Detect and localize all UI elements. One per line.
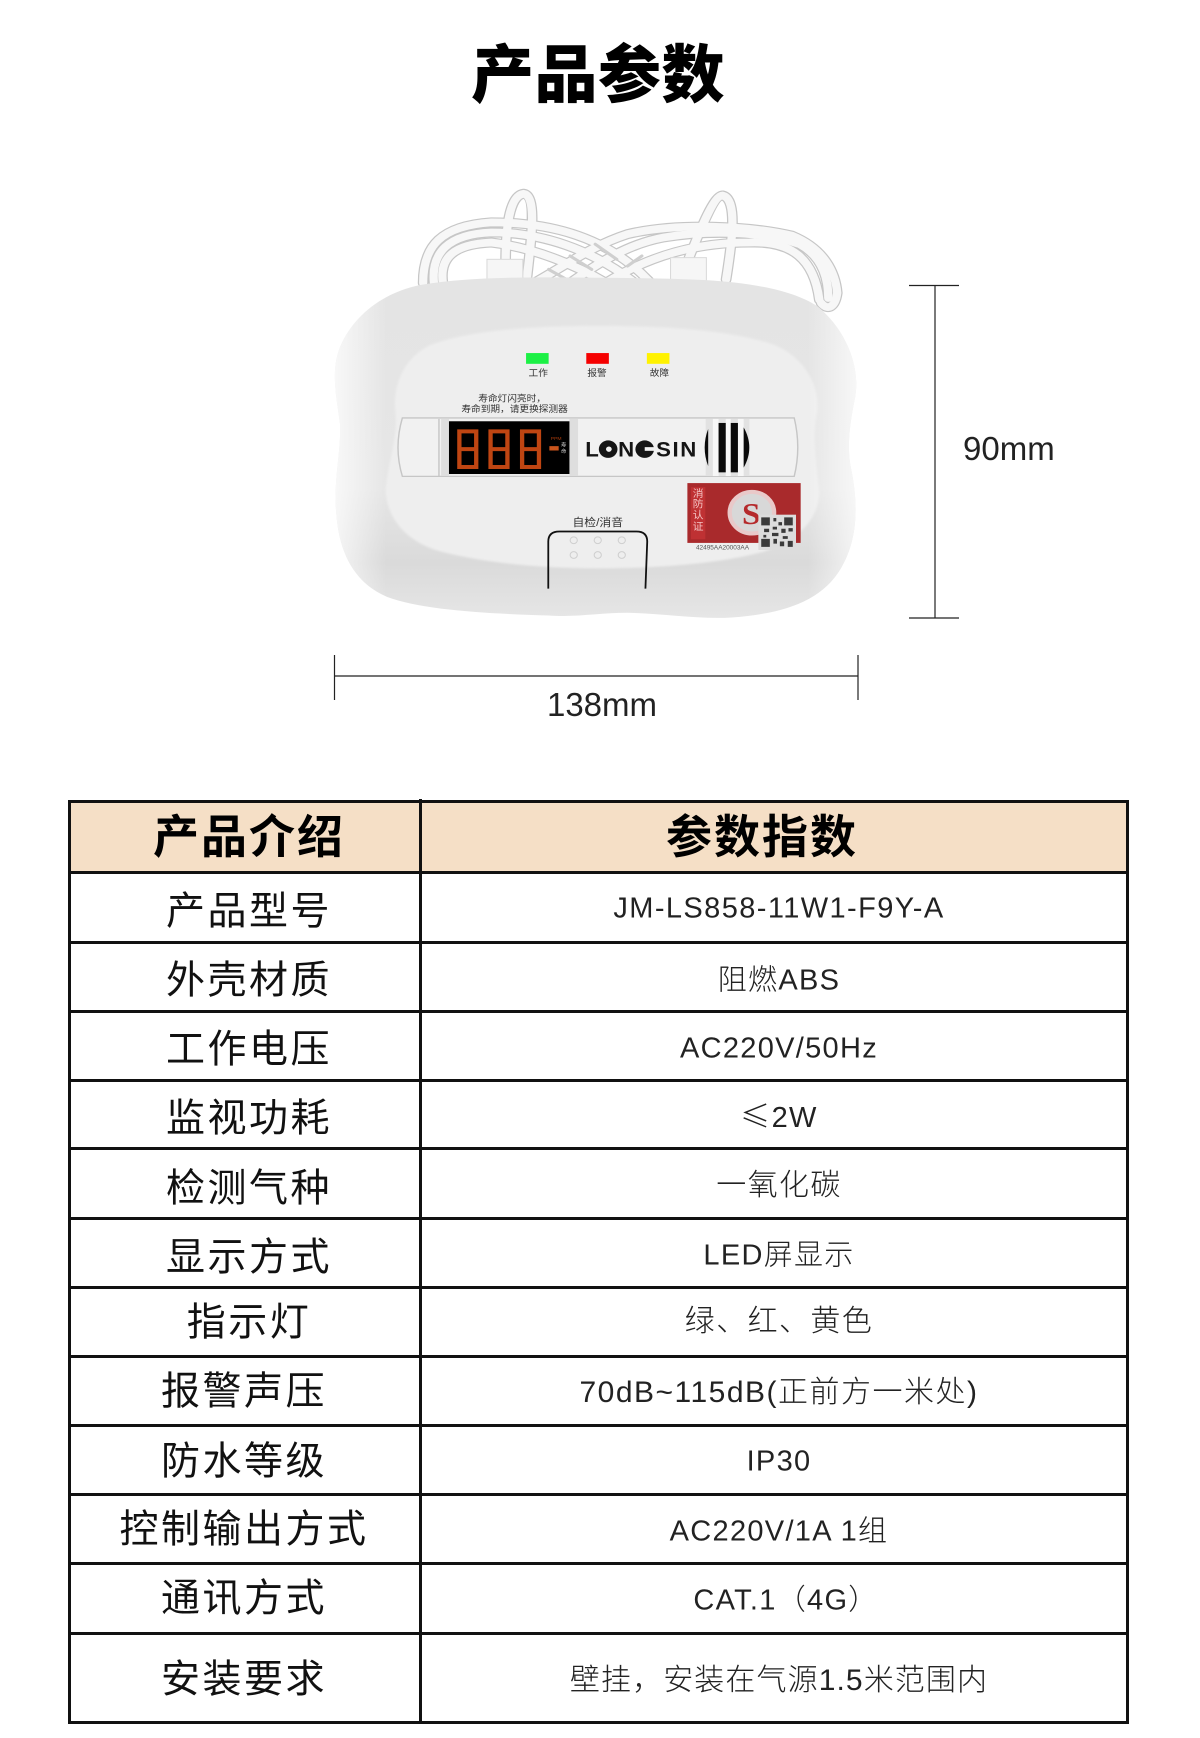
value: 一氧化碳 [716,1169,842,1202]
certification sticker: 证 [693,521,704,533]
label: 产品型号 [166,890,332,934]
dimension: width 138mm [334,655,858,723]
logo: LONGSIN: N [618,438,634,461]
device body [334,276,861,622]
label: 显示方式 [166,1236,332,1280]
certification sticker [687,483,801,552]
LED screen [449,421,569,474]
value: AC220V/1A 1组 [670,1516,888,1548]
logo: LONGSIN: L [585,438,599,461]
label: 检测气种 [166,1168,332,1210]
specification table [68,799,1129,1724]
value: 绿、红、黄色 [685,1305,873,1338]
label: 指示灯 [187,1302,311,1344]
certification sticker: 认 [693,509,704,522]
dimension: height 90mm [909,286,1055,618]
row: gas [68,1147,1129,1218]
header: parameter index: 参数指数 [666,811,858,863]
logo: LONGSIN [585,438,696,461]
row: indicator [68,1286,1129,1356]
row: model [68,871,1129,942]
value: 阻燃ABS [718,964,840,996]
display strip [398,418,798,476]
label: 安装要求 [161,1658,327,1702]
certification sticker: 防 [693,498,704,510]
row: voltage [68,1010,1129,1080]
inner face panel [386,326,819,568]
label: 控制输出方式 [119,1508,369,1552]
row: waterproof [68,1424,1129,1494]
icon: coiled white cables [423,194,837,307]
self-test button [548,515,647,589]
logo: LONGSIN: SIN [656,438,696,461]
LED screen: PPM [551,436,562,442]
LED screen: 寿 [561,441,566,448]
value: 70dB~115dB(正前方一米处) [579,1376,979,1409]
header: product intro: 产品介绍 [153,811,345,863]
indicator lights: 报警 [587,367,607,378]
product illustration with dimensions [334,188,1055,723]
certification sticker: 42495AA20003AA [696,545,750,552]
dimension: width 138mm: 138mm [547,686,657,723]
life warning text: 寿命到期，请更换探测器 [461,403,568,414]
certification sticker: S [742,497,760,531]
speaker grille [705,423,749,472]
header row [68,800,1129,872]
value: IP30 [747,1446,811,1478]
label: 监视功耗 [166,1098,332,1140]
title: 产品参数 [471,41,725,111]
value: LED屏显示 [703,1240,855,1272]
indicator lights: 工作 [529,367,548,378]
label: 外壳材质 [166,960,332,1002]
life warning text: 寿命灯闪亮时， [478,393,546,403]
body shell [335,277,856,618]
self-test button: 自检/消音 [572,515,623,529]
label: 工作电压 [166,1028,332,1072]
value: ≤2W [740,1092,818,1136]
label: 通讯方式 [161,1578,327,1620]
label: 防水等级 [161,1440,327,1484]
row: display [68,1217,1129,1287]
row: communication [68,1562,1129,1633]
LED screen: 命 [561,447,567,455]
row: sound level [68,1355,1129,1425]
certification sticker: 消 [693,488,704,500]
life warning text [461,393,568,414]
indicator lights: 故障 [650,367,669,378]
row: installation [68,1632,1129,1721]
value: CAT.1（4G） [693,1584,879,1616]
value: AC220V/50Hz [680,1032,878,1064]
row: control output [68,1493,1129,1563]
indicator lights [526,353,669,378]
row: power [68,1079,1129,1148]
dimension: height 90mm: 90mm [963,430,1055,467]
value: JM-LS858-11W1-F9Y-A [613,892,945,924]
value: 壁挂，安装在气源1.5米范围内 [570,1664,988,1697]
row: shell material [68,941,1129,1011]
label: 报警声压 [161,1370,327,1414]
